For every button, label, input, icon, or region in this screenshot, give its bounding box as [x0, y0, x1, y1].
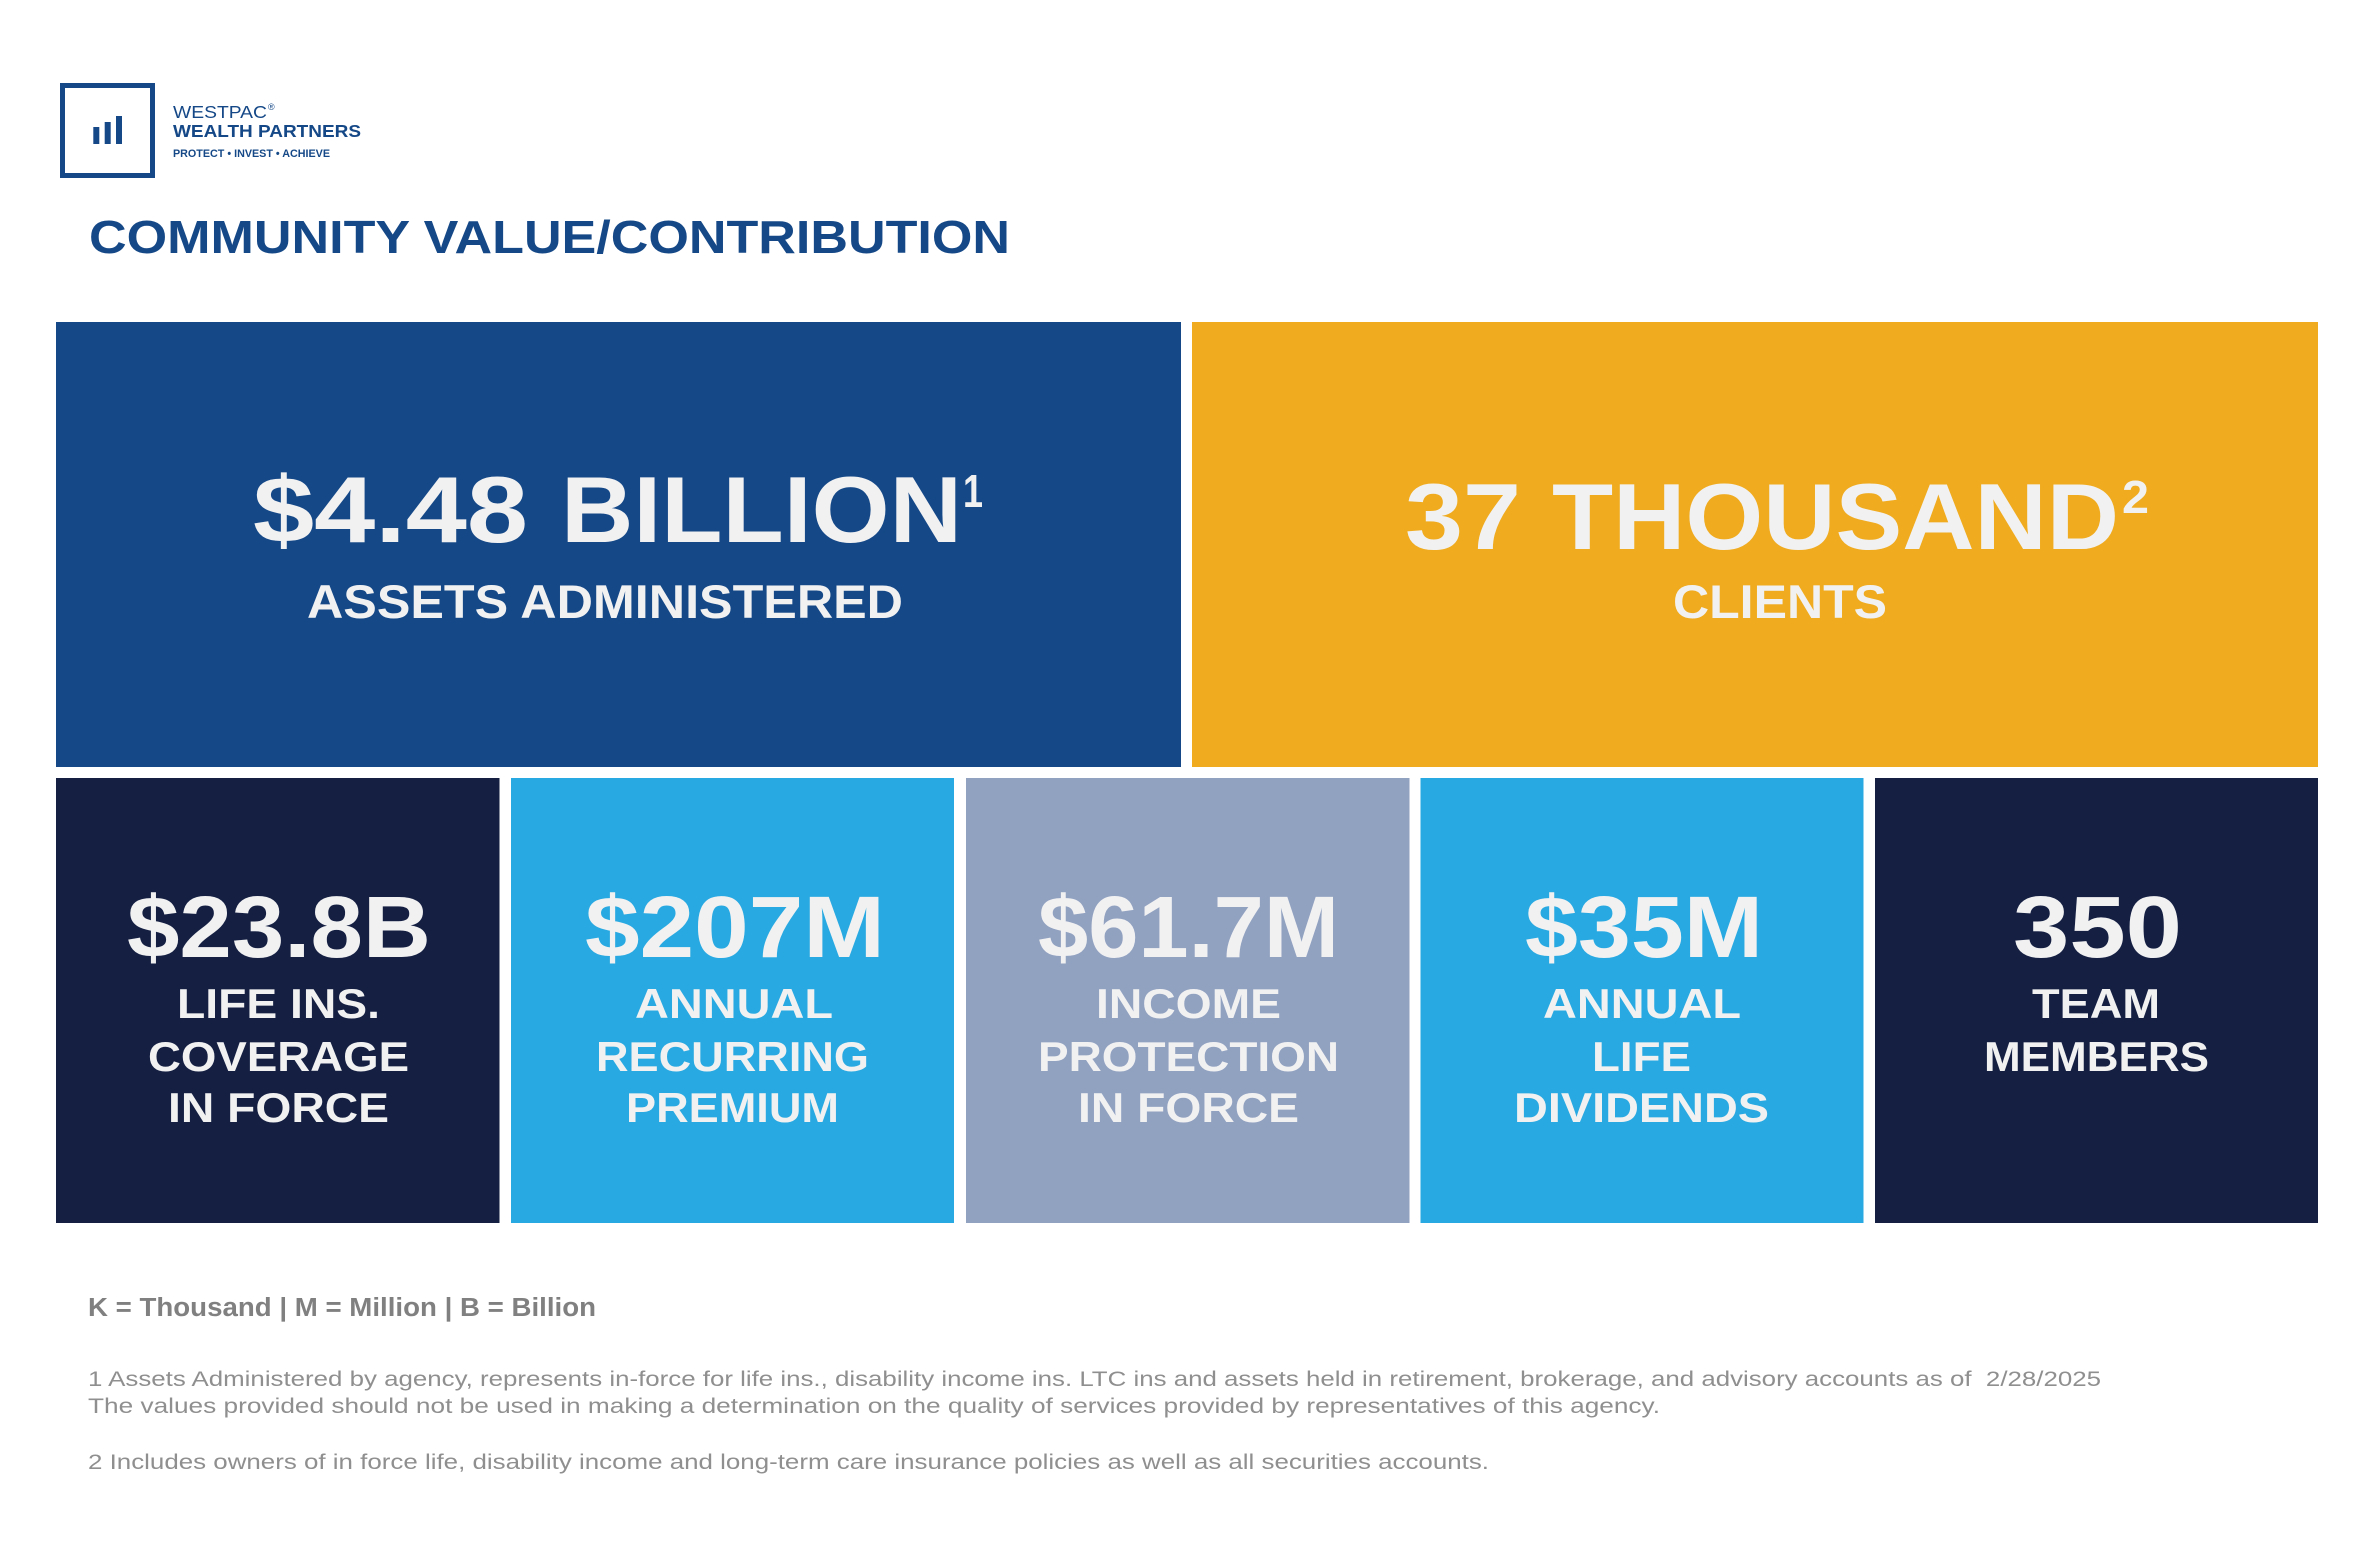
- label: annual recurring premium: RECURRING: [596, 1033, 869, 1080]
- label: annual life dividends: DIVIDENDS: [1514, 1084, 1769, 1131]
- panel: assets administered: [56, 322, 1181, 767]
- label: life ins. coverage in force: [148, 980, 409, 1131]
- label: team members: TEAM: [2032, 980, 2160, 1027]
- label: clients: CLIENTS: [1673, 576, 1887, 629]
- value: $4.48 billion: BILLION: [561, 457, 962, 562]
- label: life ins. coverage in force: IN FORCE: [168, 1084, 389, 1131]
- title: COMMUNITY VALUE/CONTRIBUTION: [89, 211, 1010, 263]
- label: life ins. coverage in force: COVERAGE: [148, 1033, 409, 1080]
- label: team members: MEMBERS: [1984, 1033, 2209, 1080]
- label: team members: [1984, 980, 2209, 1080]
- label: income protection in force: PROTECTION: [1038, 1033, 1339, 1080]
- panel: annual life dividends: [1420, 778, 1864, 1223]
- value: $207M: $207M: [585, 879, 885, 976]
- value: $61.7M: $61.7M: [1038, 879, 1339, 976]
- value: 37 thousand: 2: [2122, 471, 2149, 523]
- footnote 1: The values provided should not be used in making a determination on the quality of services provided by representatives of this agency.: [88, 1394, 1660, 1418]
- logo wordmark: [173, 102, 361, 160]
- panel: income protection in force: [966, 778, 1410, 1223]
- label: income protection in force: IN FORCE: [1078, 1084, 1299, 1131]
- footnote 2: 2 Includes owners of in force life, disability income and long-term care insurance policies as well as all securities accounts.: [88, 1450, 1489, 1474]
- panel: life insurance coverage: [56, 778, 500, 1223]
- value: $4.48 billion: $4.48: [253, 457, 528, 562]
- value: $35M: $35M: [1525, 879, 1763, 976]
- panel: annual recurring premium: [511, 778, 954, 1223]
- logo wordmark: WESTPAC: [173, 102, 267, 122]
- footnote 1: [88, 1367, 2101, 1418]
- label: life ins. coverage in force: LIFE INS.: [177, 980, 380, 1027]
- icon: square frame with bar chart: [62, 86, 152, 176]
- label: annual life dividends: [1514, 980, 1769, 1131]
- logo wordmark: WEALTH PARTNERS: [173, 121, 361, 141]
- label: annual life dividends: LIFE: [1592, 1033, 1691, 1080]
- panel: team members: [1875, 778, 2318, 1223]
- legend: unit abbreviations: K = Thousand | M = Million | B = Billion: [88, 1294, 596, 1322]
- value: $4.48 billion: 1: [963, 465, 983, 517]
- label: income protection in force: [1038, 980, 1339, 1131]
- logo: Westpac Wealth Partners: [62, 86, 361, 176]
- label: income protection in force: INCOME: [1096, 980, 1281, 1027]
- logo wordmark: PROTECT • INVEST • ACHIEVE: [173, 148, 330, 160]
- label: assets administered: ASSETS ADMINISTERED: [307, 576, 903, 629]
- panel: clients: [1192, 322, 2318, 767]
- label: annual recurring premium: PREMIUM: [626, 1084, 839, 1131]
- value: 37 thousand: 37: [1405, 464, 1521, 569]
- value: 37 thousand: THOUSAND: [1552, 464, 2119, 569]
- label: annual recurring premium: [596, 980, 869, 1131]
- value: $4.48 billion: [253, 457, 983, 562]
- label: annual recurring premium: ANNUAL: [635, 980, 833, 1027]
- footnote 1: 1 Assets Administered by agency, represents in-force for life ins., disability income ins. LTC ins and assets held in retirement, brokerage, and advisory accounts as of 2/28/2025: [88, 1367, 2101, 1391]
- label: annual life dividends: ANNUAL: [1543, 980, 1741, 1027]
- logo wordmark: ®: [268, 102, 275, 112]
- value: $23.8B: $23.8B: [127, 879, 431, 976]
- value: 350: 350: [2013, 879, 2182, 976]
